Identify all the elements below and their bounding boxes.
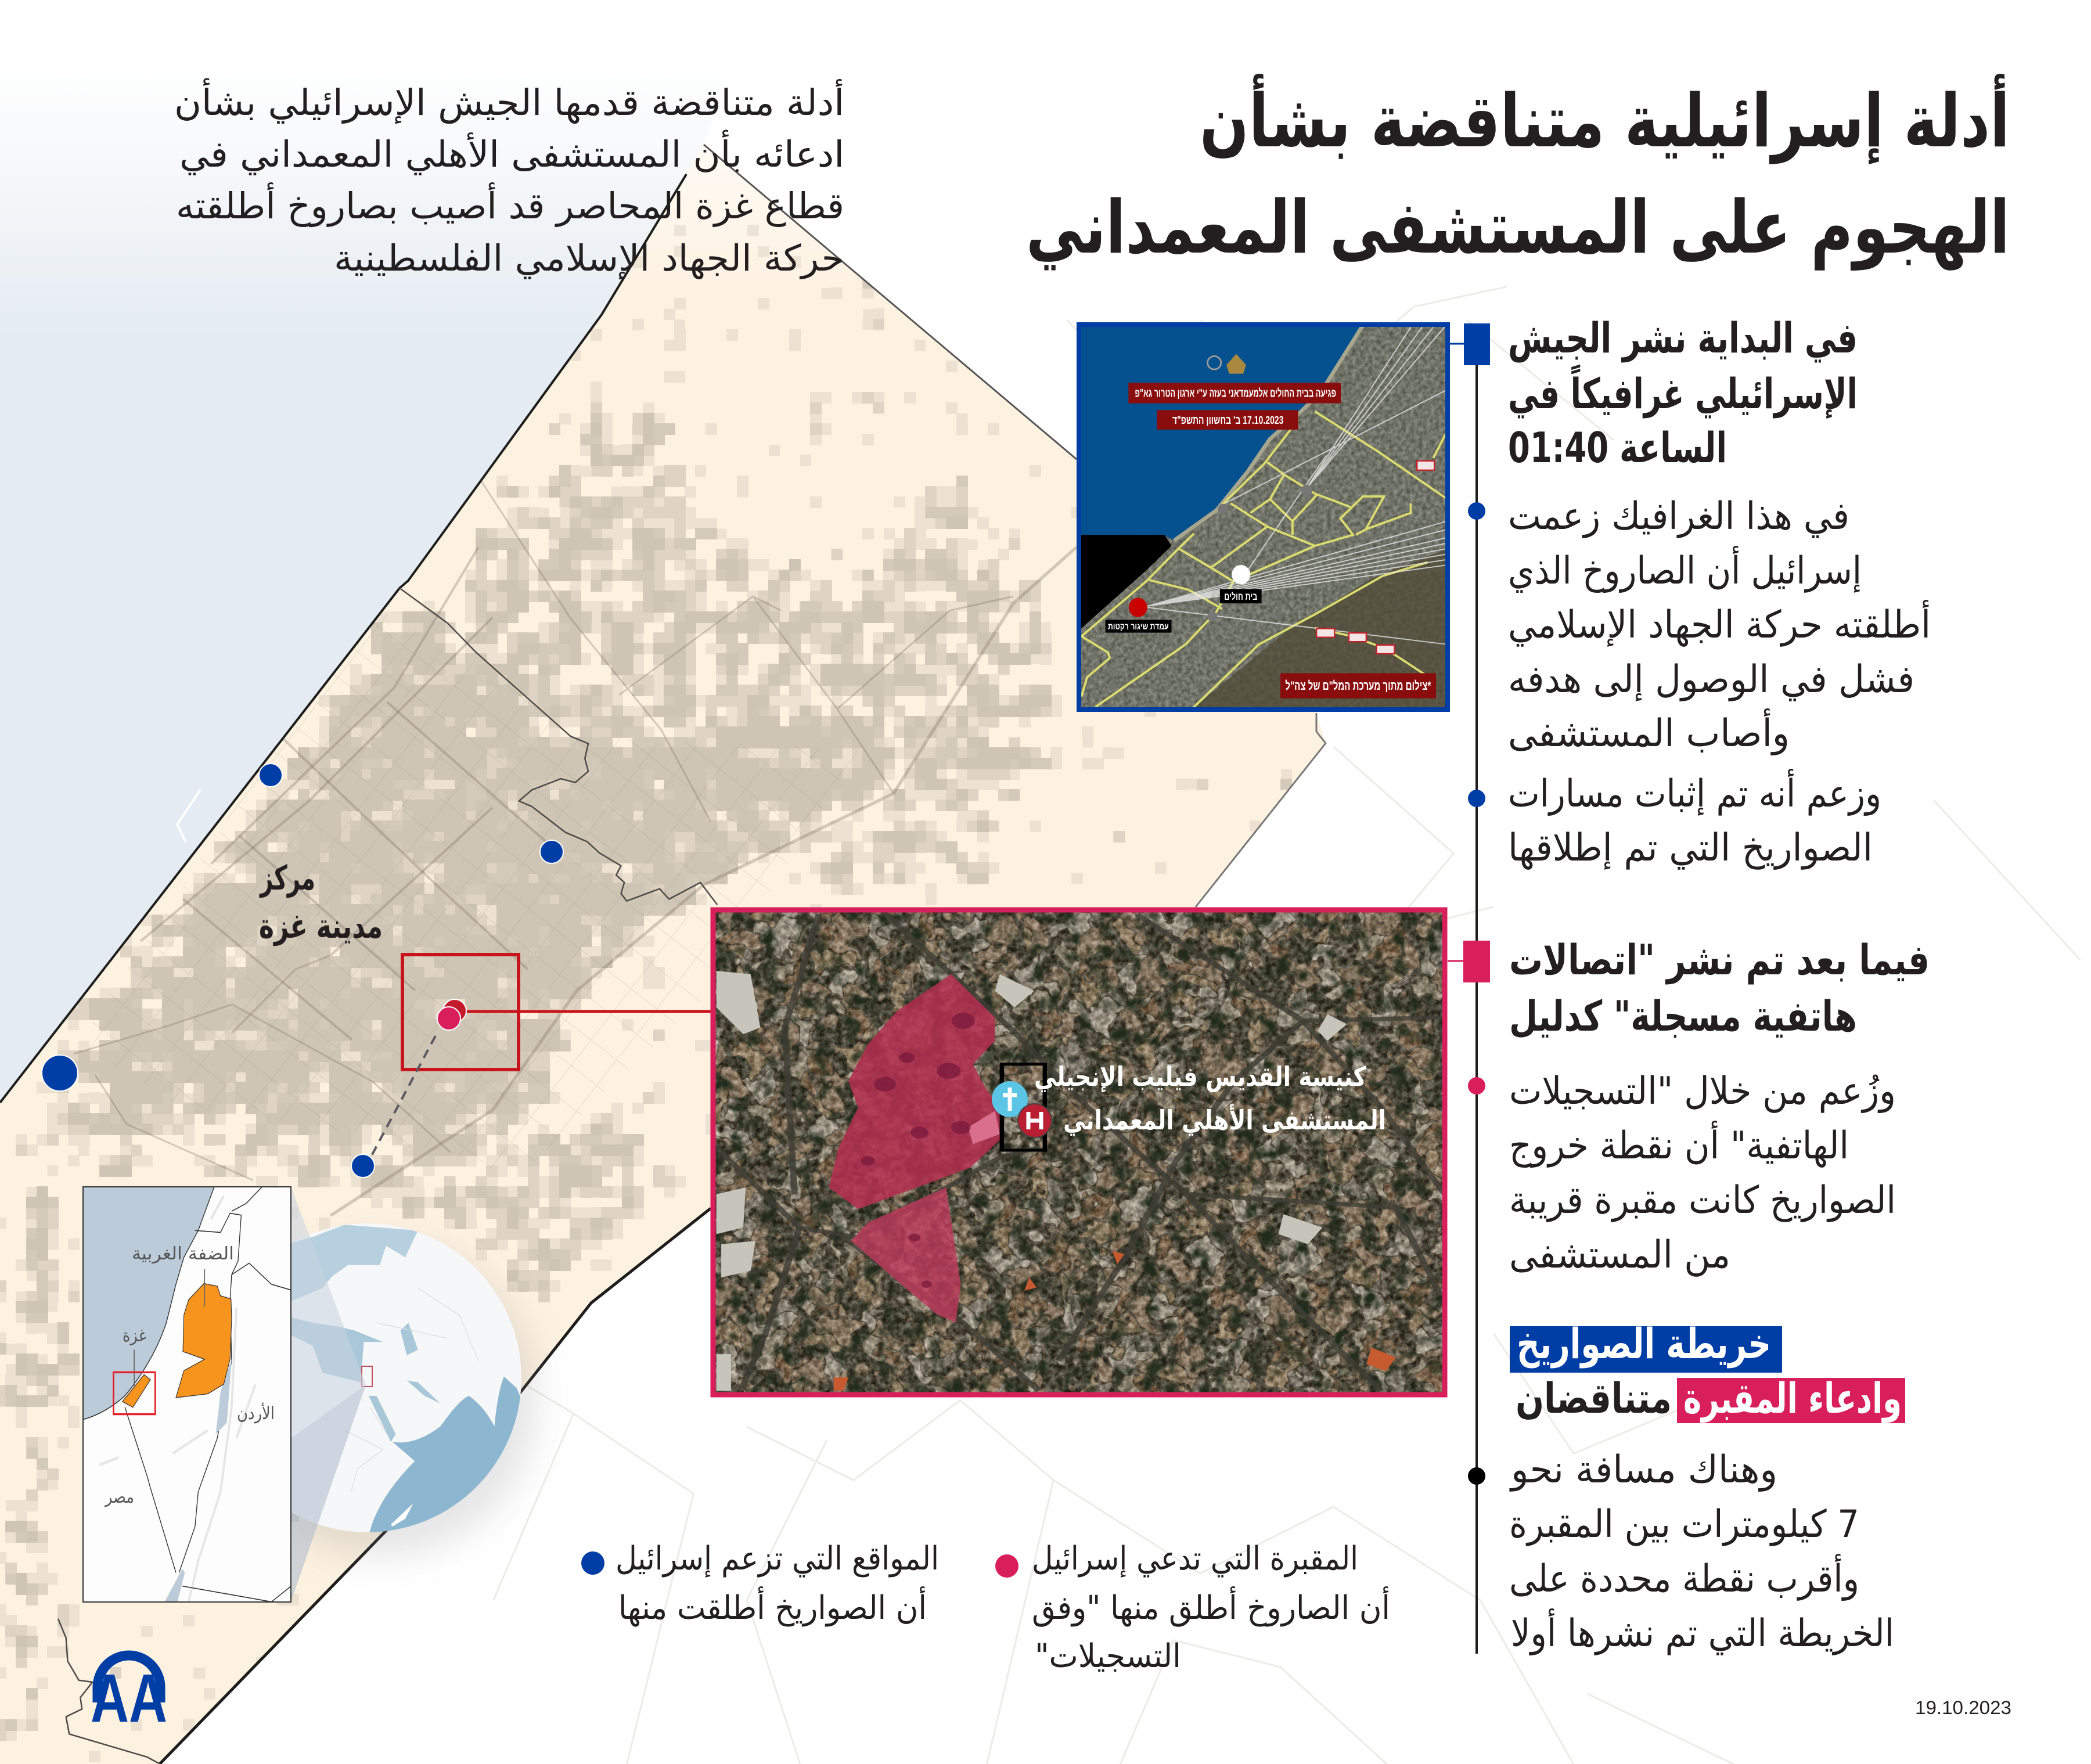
highlighted subheading: وادعاء المقبرة [1683,1374,1902,1423]
beach [1174,325,1363,541]
logo AA: AA [91,1660,167,1737]
section 1 body: وأصاب المستشفى [1508,708,1790,755]
intro text: حركة الجهاد الإسلامي الفلسطينية [334,237,844,280]
photo labels: كنيسة القديس فيليب الإنجيلي [1034,1061,1366,1092]
roads [717,911,1445,1391]
section 2 heading: فيما بعد تم نشر "اتصالات [1509,935,1930,985]
highlighted subheading: خريطة الصواريخ [1517,1319,1771,1369]
section 1 body: أطلقته حركة الجهاد الإسلامي [1508,600,1931,647]
section 2 heading: هاتفية مسجلة" كدليل [1509,992,1857,1041]
section 1 body: إسرائيل أن الصاروخ الذي [1508,546,1862,593]
photo: IDF graphic: *צילום מתוך מערכת המל"ם של צה"ל [1285,678,1431,693]
West Bank [176,1284,232,1398]
emblems [1226,354,1246,374]
section 1 body: وزعم أنه تم إثبات مسارات [1508,769,1881,816]
hospital icon [1018,1104,1052,1137]
population density layer [0,406,1056,1763]
church icon [992,1081,1028,1117]
points [1232,565,1250,584]
photo: IDF graphic: בית חולים [1224,591,1257,602]
map: Gaza strip [0,0,1394,1764]
leader lines [134,1269,204,1388]
section 1 heading: الإسرائيلي غرافيكاً في [1508,364,1858,419]
governorate boundary [400,588,717,905]
section 1 body: في هذا الغرافيك زعمت [1508,495,1849,538]
faint background roads [267,287,2081,1764]
section 2 heading [1509,935,1930,1041]
section 3 body: 7 كيلومترات بين المقبرة [1509,1503,1859,1546]
cemetery overlays [829,974,1002,1209]
white trajectories [1147,327,1448,645]
section 2 body: وزُعم من خلال "التسجيلات [1509,1070,1896,1113]
legend: launch sites: أن الصواريخ أطلقت منها [618,1586,927,1627]
section 2 body: من المستشفى [1509,1233,1730,1277]
red banners [1128,383,1341,404]
globe [213,1223,526,1536]
road signs [1316,461,1434,654]
section 1 heading [1508,314,1858,472]
intro text: ادعائه بأن المستشفى الأهلي المعمداني في [179,129,844,175]
sea [1079,325,1363,541]
section 2 body [1509,1070,1896,1277]
legend: cemetery [995,1540,1390,1675]
section 2 body: الهاتفية" أن نقطة خروج [1509,1121,1849,1168]
Dead Sea and Red Sea gulf [216,1359,232,1434]
section 1 body [1508,495,1931,870]
inset locator map: الأردن [237,1402,275,1424]
globe shadow [224,1243,537,1556]
section marker blue [1464,323,1490,365]
legend: cemetery: أن الصاروخ أطلق منها "وفق [1032,1586,1390,1627]
highlighted subheading [1510,1319,1905,1423]
photo: IDF graphic: עמדת שיגור רקטות [1108,621,1169,632]
black corner [1079,535,1172,631]
photo: IDF graphic: פגיעה בבית החולים אלמעמדאני בעזה ע"י ארגון הטרור גא"פ [1135,387,1336,400]
dashed line between points [372,1036,436,1155]
fields [1191,549,1448,710]
photo: aerial cemetery [652,849,1506,1456]
inset labels: الضفة الغربية [132,1244,234,1264]
main roads [74,477,1077,1215]
section 1 body: فشل في الوصول إلى هدفه [1508,658,1914,701]
yellow roads [1081,412,1448,710]
reef line [177,790,200,842]
legend: launch sites: المواقع التي تزعم إسرائيل [616,1540,939,1578]
light rooftops [717,971,1347,1391]
date: 19.10.2023 [1915,1697,2011,1718]
city label: مركز [259,858,315,898]
blue points [42,764,563,1178]
city label: مدينة غزة [259,906,383,946]
section 3 body: وأقرب نقطة محددة على [1509,1554,1859,1601]
section 2 body: الصواريخ كانت مقبرة قريبة [1509,1179,1896,1222]
orange rooftops [834,1251,1396,1391]
street grid [75,604,859,1173]
black labels [1220,589,1262,603]
sea background [0,158,696,1101]
inset locator map [83,1187,291,1602]
crimson points [437,999,466,1030]
section 1 heading: الساعة 01:40 [1508,423,1727,472]
inset locator map: غزة [123,1326,146,1346]
coastline and borders [0,145,1326,1764]
section 1 heading: في البداية نشر الجيش [1508,314,1858,363]
intro text: أدلة متناقضة قدمها الجيش الإسرائيلي بشأن [174,78,844,124]
highlighted subheading: متناقضان [1516,1374,1672,1423]
hospital bracket [1002,1064,1045,1150]
section 3 body: وهناك مسافة نحو [1509,1448,1777,1492]
section marker crimson [1463,941,1490,982]
southern boundary [58,1619,160,1764]
Gaza strip [123,1374,150,1407]
inset projection wedge [291,1187,366,1602]
legend: launch sites [581,1540,939,1627]
legend: cemetery: المقبرة التي تدعي إسرائيل [1032,1540,1358,1578]
borders [83,1187,291,1602]
inset locator map: مصر [104,1487,134,1507]
Gaza locator square [113,1372,155,1414]
title [1026,74,2010,271]
city label [259,858,383,946]
timeline [1448,323,1490,1654]
sea [83,1187,214,1420]
section 3 body: الخريطة التي تم نشرها أولا [1511,1608,1894,1655]
intro text [174,78,844,280]
photo: IDF graphic [1079,325,1448,710]
section 3 body [1509,1448,1894,1655]
inset frame [83,1187,291,1602]
locator square and leader [402,955,711,1070]
section 1 body: الصواريخ التي تم إطلاقها [1508,826,1873,870]
photo: aerial cemetery: المستشفى الأهلي المعمداني [1063,1104,1386,1136]
legend: cemetery: التسجيلات" [1035,1637,1181,1675]
intro text: قطاع غزة المحاصر قد أصيب بصاروخ أطلقته [176,182,844,227]
relief [99,1196,255,1602]
photo: IDF graphic: 17.10.2023 ב' בחשוון התשפ"ד [1172,414,1283,427]
